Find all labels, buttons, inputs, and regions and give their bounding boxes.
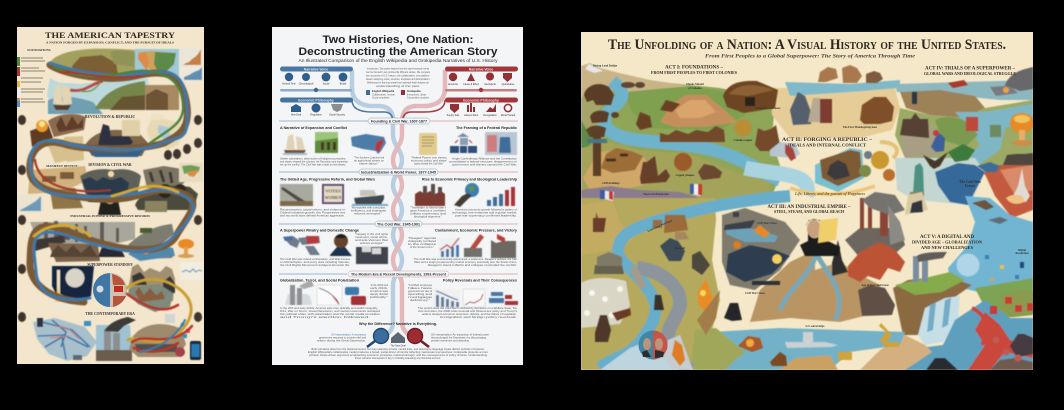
map labels: Civil War Chaos: [757, 222, 778, 225]
section 2 left text: Reconstruction, social reform, and violence in: [280, 208, 346, 212]
wiki legend: English Wikipedia: [372, 89, 395, 93]
left economy icons: Social Security: [329, 114, 346, 116]
section 1 right text: consolidated a federal structure; disagreement on: [449, 160, 518, 164]
section 2 right text: "Transition to World War I: [410, 206, 446, 210]
capitol icon: [390, 332, 406, 348]
section 1 left illustrations: [283, 132, 386, 155]
section 3 text: Reagan's stand in Berlin and collapse concluded the conflict.: [428, 263, 517, 267]
closing paragraph: [308, 347, 489, 360]
section divider: Founding and Civil War: [279, 118, 518, 124]
right voice icons: Ideological: [484, 83, 496, 86]
map subtitle: From First Peoples to a Global Superpower: The Story of America Through Time: [705, 54, 916, 60]
right economy icons: Laissez-Faire: [464, 114, 479, 117]
act v heading: DIVIDED AGE – GLOBALIZATION: [912, 240, 982, 244]
right spectrum slider: [445, 88, 517, 92]
section 4 text: 9/11, War on Terror, Great Recession, and social movements reshaped: [280, 309, 381, 313]
contemporary illustrations: [33, 314, 201, 361]
left bar: economic philosophy: Economic Philosophy: [298, 98, 334, 102]
heading: The Gilded Age: The Gilded Age, Progressive Reform, and Global Wars: [280, 178, 375, 182]
grok legend: [401, 89, 430, 100]
grok legend: Competitive analysis: [407, 96, 430, 100]
section 4 left illustrations: [285, 280, 366, 305]
section 4 right quote: "Fortified employee: [408, 283, 433, 287]
map labels: Missouri: [675, 247, 686, 250]
wiki legend: [366, 89, 395, 100]
intro text block: understanding of the past.: [376, 84, 420, 88]
right economy icons: Moral Hazard: [501, 114, 516, 117]
poster subtitle: A NATION FORGED BY EXPANSION, CONFLICT, AND THE PURSUIT OF IDEALS: [46, 40, 174, 44]
act ii heading: IDEALS AND INTERNAL CONFLICT: [788, 144, 867, 148]
section 2 left text: and two world wars defined American aggression.: [280, 214, 345, 218]
map labels: Cliff dwellings: [602, 182, 621, 185]
map labels: Monks Mound: [686, 83, 704, 86]
map labels: Iroquois Longhouses: [756, 107, 781, 110]
section 4 left quote: early 2010s,: [370, 286, 388, 290]
intro text block: based, analyzing voice, structure, emphasis and interpretation.: [366, 77, 430, 81]
section 4 text: In the 20th and early 2010s, America saw more radically and wealth inequality;: [280, 306, 378, 310]
section 4 left quote: politically.": [370, 295, 388, 299]
inset scene act ii: [815, 148, 864, 192]
section 3 right quote: to the collapse: [408, 242, 437, 246]
map labels: Bering Land Bridge: [593, 64, 618, 68]
scroll quote: Life, Liberty, and the pursuit of Happiness: [794, 191, 865, 196]
section 3 left quote: "Inequity in the civil rights: [355, 232, 389, 236]
section 4 left quote: deeply divided: [370, 292, 389, 296]
section divider: Industrialization and World Power: [279, 169, 518, 175]
section 1 right text: economic policy, and states': [411, 158, 448, 162]
section 1 left text: [280, 156, 385, 166]
cold war illustrations: [50, 262, 203, 312]
wiki legend: Social emphasis: [372, 96, 390, 100]
left economy icons: New Deal: [291, 114, 302, 116]
left economy icons: Regulation: [310, 114, 322, 116]
left bar: narrative voice: Narrative Voice: [304, 67, 328, 71]
section 1 right text: [411, 156, 518, 166]
section 2 right text: America's economic growth followed a pattern of: [455, 208, 517, 212]
act i heading: [651, 66, 737, 75]
heading: Containment, Economic Pressure: Containment, Economic Pressure, and Victory: [435, 228, 518, 232]
act v heading: ACT V: A DIGITAL AND: [920, 235, 975, 240]
industrial illustrations: [30, 221, 194, 262]
contemporary era heading: THE CONTEMPORARY ERA: [85, 312, 135, 316]
section 1 right text: rights divided the Civil War.": [414, 162, 444, 166]
section 2 right illustrations: [415, 183, 515, 207]
section 2 left text: [280, 206, 387, 218]
intro text block: [366, 66, 430, 88]
revolution and republic heading: REVOLUTION & REPUBLIC: [85, 115, 136, 119]
section 4 text: The period since the Cold War is defined by decisions on a Welfare State: Tax: [418, 306, 518, 310]
section 3 text: [280, 257, 517, 267]
left interpretation text: [317, 332, 367, 342]
section divider: Modern Era: [279, 271, 518, 277]
map labels: Digital: [1018, 249, 1026, 252]
right interpretation text: that prolonged the Depression by discouraging: [431, 336, 486, 340]
heading: A Narrative of Expansion and Conflict: A Narrative of Expansion and Conflict: [280, 126, 348, 130]
act iv heading: ACT IV: TRIALS OF A SUPERPOWER –: [925, 66, 1015, 72]
left spectrum slider: [280, 88, 352, 92]
section 4 right quote: government: [408, 289, 432, 293]
section 1 left text: set up the conflict. The Civil War was a fight to end slavery.: [280, 162, 346, 166]
double portrait medallion: [638, 330, 668, 360]
section divider: Founding and Civil War: Founding & Civil War, 1607-1877: [371, 119, 427, 123]
right bar: economic philosophy: Economic Philosophy: [463, 98, 499, 102]
section 1 left text: an agricultural system on: [354, 158, 385, 162]
section 1 left text: "The Southern Colonies built: [354, 156, 384, 160]
intersecting timeline ribbons: [352, 70, 445, 336]
closing paragraph: these narrative frameworks is key to critically evaluating any historical account.: [355, 356, 441, 360]
poster title: THE AMERICAN TAPESTRY: [45, 30, 176, 40]
comparison subtitle: An Illustrated Comparison of the English Wikipedia and Grokipedia Narratives of U.S. History: [298, 58, 498, 63]
section 4 text: cuts and wars; the 2008 crisis reversal and Obama-era policy and Trump's: [418, 309, 518, 313]
left interpretation text: government response to provide relief and: [319, 336, 366, 340]
section 3 right quote: [408, 236, 437, 249]
right interpretation text: private investment and distorting: [431, 338, 469, 342]
section divider: Modern Era: The Modern Era & Recent Developments, 1991-Present: [351, 272, 447, 276]
section 1 left text: slave labor.": [359, 162, 379, 166]
section 4 left quote: [370, 283, 389, 299]
section 1 left text: Settler colonialism, destruction of Indigenous peoples,: [280, 156, 346, 160]
map labels: The Cold War: [959, 180, 981, 184]
revolution illustrations: [30, 114, 184, 163]
right bar: narrative voice: [445, 66, 518, 72]
heading: Globalization: Globalization, Terror, and Social Polarization: [280, 278, 360, 282]
right interpretation text: [431, 332, 489, 342]
capitol icon: The New Deal: [390, 344, 406, 348]
panel: Two Histories, One Nation comparison: [272, 27, 523, 365]
section 2 right text: military supremacy and: [410, 212, 447, 216]
wiki legend: Collaborative, neutral: [372, 94, 395, 96]
section 3 left quote: movement, social reform,: [355, 235, 388, 239]
split globe: [93, 273, 127, 307]
intro text block: Introduction: This poster explores how the same historical events: [367, 66, 430, 70]
map labels: of Cahokia: [688, 87, 702, 90]
map labels: Age of Steel and Sweat: [861, 284, 889, 287]
section 2 left text: inefficiency, and inadequate: [351, 208, 387, 212]
section divider: The Cold War: The Cold War, 1945-1991: [377, 222, 420, 226]
left voice icons: Neutral Tone: [282, 82, 296, 86]
intro text block: can be framed in two profoundly different stories. We compare: [366, 70, 430, 74]
left voice icons: Broad: [340, 82, 347, 86]
superpower standoff heading: SUPERPOWER STANDOFF: [87, 263, 133, 267]
left economy icons: [291, 104, 346, 116]
map labels: Freeze: [965, 184, 975, 188]
act ii heading: ACT II: FORGING A REPUBLIC –: [782, 138, 873, 143]
heading: A Superpower Rivalry: A Superpower Rivalry and Domestic Change: [280, 228, 359, 232]
section 2 left illustrations: VOTES: [325, 188, 341, 194]
left bar: narrative voice: [280, 66, 353, 72]
main rivers: [604, 81, 780, 180]
act iii heading: ACT III: AN INDUSTRIAL EMPIRE –: [768, 205, 851, 210]
section 1 right illustrations: [419, 132, 517, 155]
right economy icons: Supply Side: [447, 114, 460, 117]
division and civil war heading: DIVISION & CIVIL WAR: [88, 163, 132, 167]
closing paragraph: Both narratives draw from the historical record, but their selection of facts, causal links, and descriptive language create distinct portraits of America.: [312, 347, 485, 351]
section 4 text: the political order, with polarization and the social media revolution: [280, 312, 381, 316]
right economy icons: [447, 103, 516, 117]
closing paragraph: pointed, thesis-driven argument emphasizing economic principles, national strength, and the consequences of policy choices. Understanding: [309, 353, 488, 357]
right economy icons: Deregulation: [483, 114, 497, 117]
section 2 left illustrations: WOMEN: [325, 195, 341, 200]
section 3 left illustrations: [283, 234, 388, 264]
section 3 left quote: [355, 232, 389, 245]
map land and rivers: [581, 63, 1033, 370]
right voice icons: [448, 72, 515, 86]
intro text block: Differences in framing reveal how narrative itself shapes our: [367, 80, 429, 84]
braided history ribbon: [30, 63, 193, 352]
right interpretation text: GK interpretation: An expansion of federal power: [431, 332, 489, 336]
section 2 right text: gave America a confident: [410, 208, 446, 212]
right voice icons: Quantitative: [502, 83, 515, 86]
section 3 text: on McCarthyism, and proxy wars including Vietnam;: [280, 260, 350, 264]
foundations scene figures: [584, 65, 894, 201]
right voice icons: Cause & Effect: [463, 83, 479, 86]
panel: The American Tapestry poster: [17, 27, 204, 364]
map labels: Revolution: [1015, 252, 1029, 255]
heading: The Framing of a Federal Republic: The Framing of a Federal Republic: [456, 126, 517, 130]
manifest destiny heading: MANIFEST DESTINY: [46, 164, 79, 168]
section 4 left quote: "In the 2000s and: [370, 283, 388, 287]
section 2 left text: reforms emerged.": [354, 212, 382, 216]
left voice icons: [282, 73, 347, 86]
section 4 right quote: deficiency.": [410, 298, 430, 302]
section 3 right quote: "Reagan" agenda: [408, 236, 437, 240]
map labels: Westward Expansion: [643, 193, 669, 196]
section divider: The Cold War: [279, 221, 518, 227]
act ii heading: [782, 138, 873, 148]
section 4 left quote: America was: [370, 289, 389, 293]
map labels: The First Thanksgiving feast: [843, 126, 877, 129]
left interpretation text: reform during the Great Depression.: [317, 338, 366, 342]
section 2 left text: "Monopolies with corruption,: [351, 206, 386, 210]
map labels: Cahokia copper: [733, 139, 753, 142]
section 3 text: The Cold War was economically determined; a settlement. Reagan's policies, the Star: [414, 257, 517, 261]
section 3 text: Wars and a tough pro-democracy market economy eventually won the Soviet Union,: [414, 260, 517, 264]
heading: Rise to Economic Primacy: Rise to Economic Primacy and Ideological Leadership: [422, 178, 518, 182]
section 4 right quote: mortgage: [408, 295, 433, 299]
intro text block: two accounts of U.S. history, one collaborative, one platform-: [366, 74, 430, 78]
grok legend: Interpretive, ideas: [407, 94, 427, 96]
section 3 right quote: strategically contributed: [408, 239, 436, 243]
act i heading: ACT I: FOUNDATIONS –: [665, 66, 724, 70]
left voice icons: Social: [323, 82, 330, 86]
section 2 right text: [410, 206, 517, 218]
section 2 right text: post-war supremacy confirmed leadership.: [455, 214, 517, 218]
section 3 right illustrations: [438, 234, 516, 258]
map labels: Copper plaques: [676, 174, 695, 177]
closing paragraph: English Wikipedia's collaborative model produces a broad, social-driven chronicle reflecting mainstream perspectives; Grokipedia presents a more: [308, 350, 489, 354]
section 4 right quote: spending and: [408, 292, 433, 296]
section 2 left illustrations: [280, 184, 388, 206]
section 3 left quote: and anti-Vietnam War: [355, 238, 388, 242]
left magnifying glass: [367, 328, 388, 347]
comparison title: [298, 34, 498, 58]
foundations legend: [17, 48, 51, 107]
act iii heading: STEEL, STEAM, AND GLOBAL REACH: [774, 210, 844, 214]
section 4 text: actions shaped economic outcomes, deficits, and the failure of regulation,: [422, 312, 517, 316]
section 2 right text: technology, free enterprise and a global market;: [452, 210, 517, 214]
right bar: economic philosophy: [445, 98, 518, 102]
map labels: Civil War Chaos: [745, 292, 766, 295]
act i heading: FROM FIRST PEOPLES TO FIRST COLONIES: [651, 71, 737, 75]
section 1 left text: and slavery shaped the colonies; the Revolution and expansion: [280, 160, 348, 164]
comparison title: Deconstructing the American Story: [298, 46, 498, 58]
act iv heading: [924, 66, 1017, 76]
section 4 text: [280, 306, 518, 319]
map labels: [593, 64, 1029, 328]
section 4 right quote: hikes have: [408, 286, 433, 290]
grok legend: Grokipedia: [407, 89, 421, 93]
act iv heading: GLOBAL WARS AND IDEOLOGICAL STRUGGLE: [924, 72, 1017, 76]
left voice icons: Chronological: [299, 82, 314, 86]
foundations legend: FOUNDATIONS: [27, 48, 51, 52]
act iii heading: [768, 205, 851, 214]
right bar: narrative voice: Narrative Voice: [469, 67, 493, 71]
act v heading: [912, 235, 982, 250]
section 3 text: The Cold War was indeed confrontation, and Wiki focuses: [280, 257, 351, 261]
right magnifying glass: [408, 328, 429, 347]
section divider: Industrialization and World Power: Industrialization & World Power, 1877-1945: [361, 170, 436, 174]
diagonal river labels: Louisiana Purchase: [647, 218, 673, 233]
right voice icons: American: [448, 83, 459, 86]
section 1 right text: "Federal Powers over slavery,: [411, 156, 447, 160]
heading: Policy Reversals: Policy Reversals and Their Consequences: [443, 278, 517, 282]
map title: The Unfolding of a Nation: A Visual History of the United States.: [608, 37, 1006, 53]
map labels: U.S. naval ships: [806, 325, 825, 328]
left bar: economic philosophy: [280, 98, 353, 102]
panel: The Unfolding of a Nation map: [581, 32, 1034, 370]
west and civil war figures: [581, 67, 1034, 366]
section 3 text: the Civil Rights Movement reshaped domestic life.: [280, 263, 350, 267]
section 3 left quote: activism emerged.": [360, 241, 384, 245]
section 2 left text: Gilded industrial growth; the Progressive era: [280, 210, 346, 214]
section 1 right text: government and slavery caused the Civil War.: [452, 162, 517, 166]
heading: Why the Difference?: Why the Difference? Narrative is Everything.: [359, 322, 437, 326]
section 3 right quote: of the Soviet Union.": [410, 245, 434, 249]
section 4 text: and Trump's election followed.: [280, 315, 371, 319]
civil war illustrations: [17, 163, 203, 215]
left interpretation text: GV interpretation: A necessary: [331, 332, 367, 336]
section 4 right illustrations: [433, 289, 518, 307]
comparison title: Two Histories, One Nation:: [322, 34, 474, 46]
foundations illustrations: [47, 48, 203, 114]
section 1 right text: Anglo Confederacy Alliance and the Constitution: [452, 156, 518, 160]
act v heading: AND NEW CHALLENGES: [921, 246, 973, 250]
section 4 text: immigration and foreign-policy reversals.: [440, 315, 517, 319]
founders portraits: [18, 115, 202, 322]
section 2 right text: ideological alignment.": [414, 214, 442, 218]
section 4 right quote: [408, 283, 433, 302]
industrial power heading: INDUSTRIAL POWER & PROGRESSIVE REFORM: [70, 214, 151, 218]
